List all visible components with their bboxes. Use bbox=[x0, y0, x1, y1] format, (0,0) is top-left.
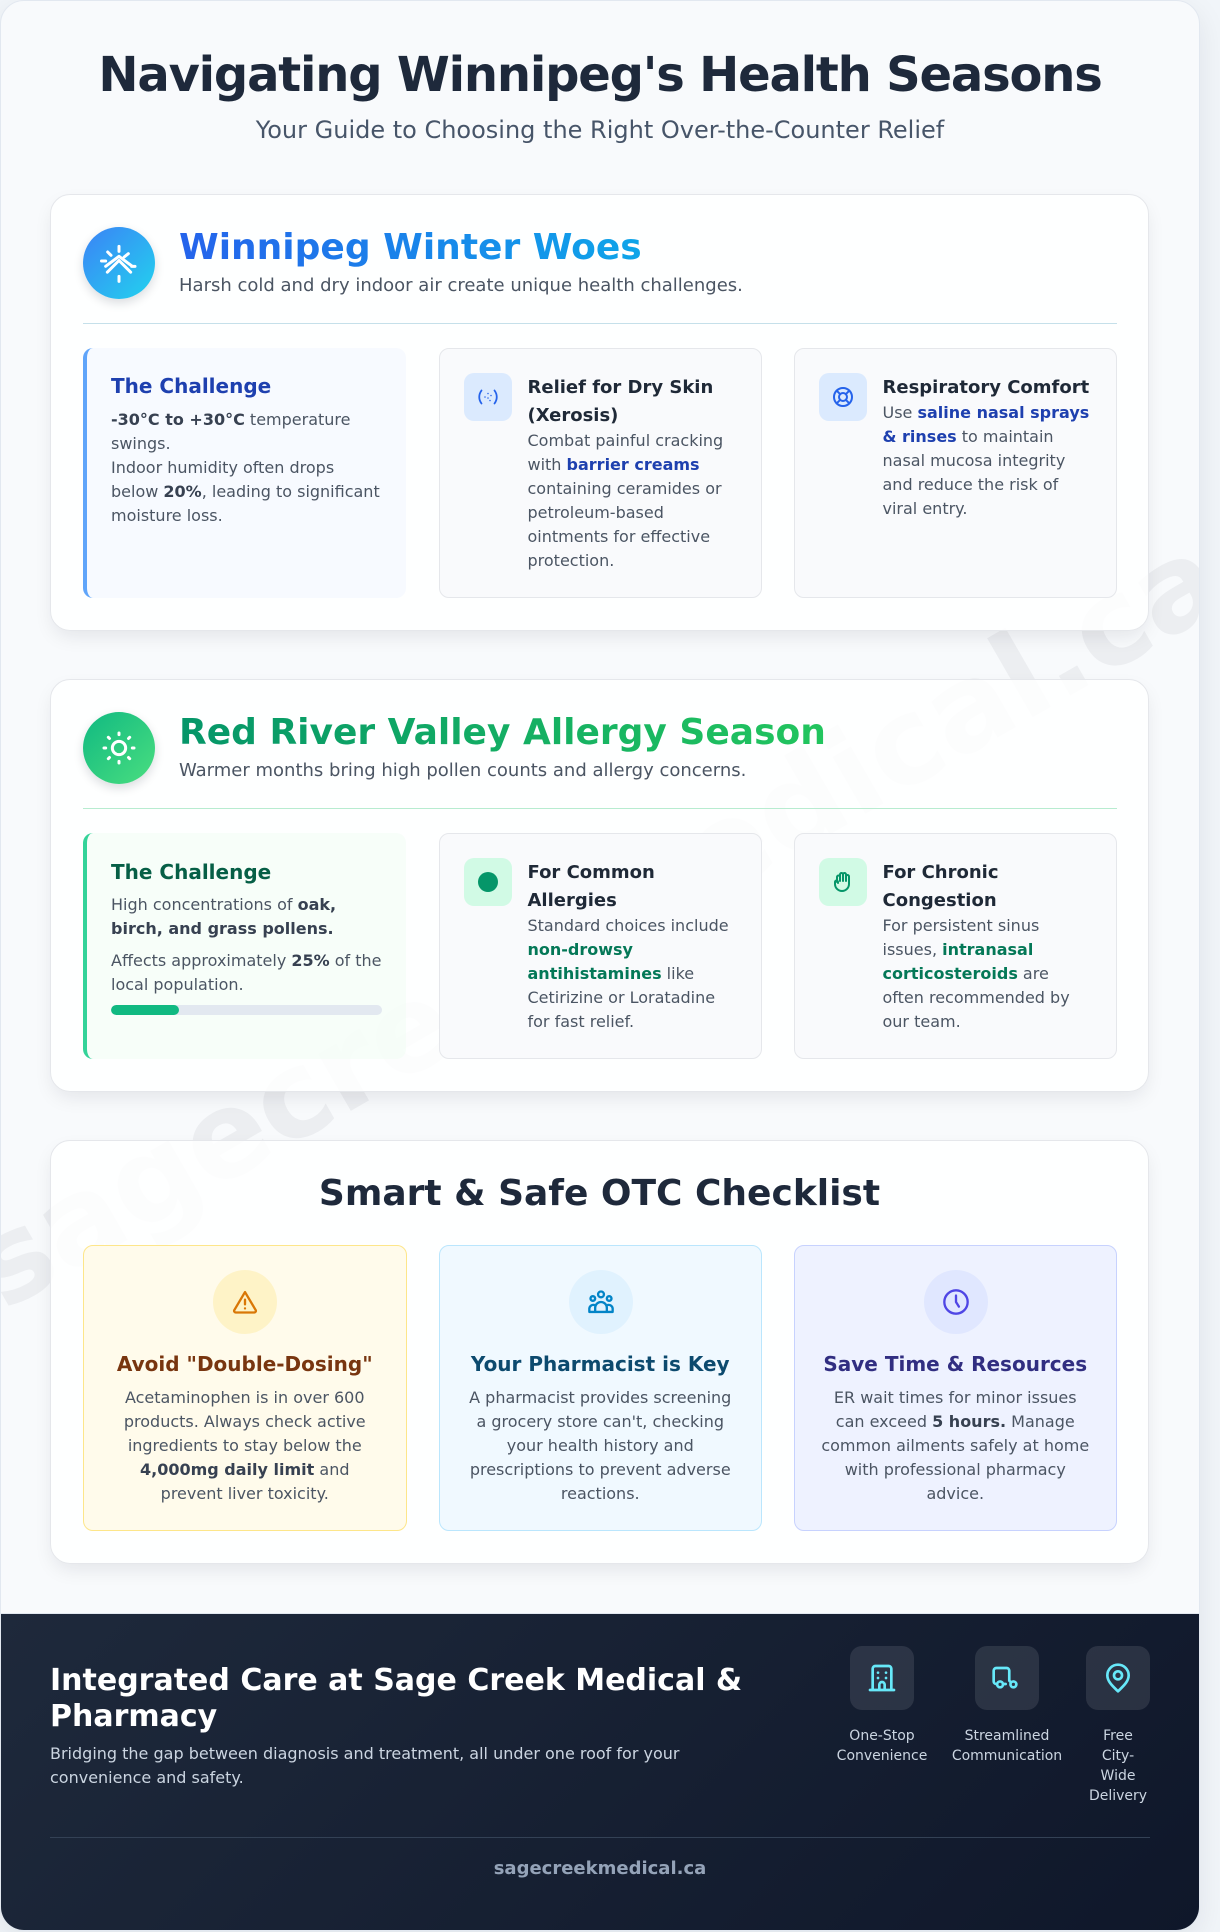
icon: dry skin bbox=[464, 373, 512, 421]
tile text: reactions. bbox=[561, 1484, 640, 1503]
card text: local population. bbox=[111, 975, 244, 994]
tile: pharmacist bbox=[438, 1245, 762, 1531]
card text: often recommended by bbox=[882, 988, 1070, 1007]
card text: corticosteroids are bbox=[882, 964, 1049, 983]
card text bbox=[882, 403, 1089, 518]
icon: snowflake chevrons bbox=[83, 227, 155, 299]
icon: sun bbox=[83, 712, 155, 784]
label: one-stop: One-Stop bbox=[849, 1728, 915, 1744]
label: one-stop: Convenience bbox=[837, 1748, 927, 1764]
card: respiratory bbox=[794, 348, 1117, 598]
card text: for fast relief. bbox=[528, 1012, 634, 1031]
card heading bbox=[882, 862, 998, 911]
footer text: Bridging the gap between diagnosis and treatment, all under one roof for your bbox=[50, 1744, 679, 1763]
card text: our team. bbox=[882, 1012, 961, 1031]
progress bar 25% bbox=[111, 1005, 382, 1015]
footer heading: Integrated Care at Sage Creek Medical & bbox=[50, 1662, 742, 1698]
card text: moisture loss. bbox=[111, 506, 223, 525]
tile: save time bbox=[794, 1245, 1117, 1531]
card heading: (Xerosis) bbox=[528, 405, 618, 426]
label: delivery: Wide bbox=[1101, 1768, 1135, 1784]
card text: Cetirizine or Loratadine bbox=[528, 988, 715, 1007]
card text: High concentrations of oak, bbox=[111, 895, 336, 914]
icon: hand bbox=[818, 858, 866, 906]
icon: clock bbox=[924, 1270, 988, 1334]
card text bbox=[111, 951, 382, 994]
icon: warning bbox=[213, 1270, 277, 1334]
icon: dot bbox=[464, 858, 512, 906]
icon: lifebuoy bbox=[818, 373, 866, 421]
card text: and reduce the risk of bbox=[882, 475, 1058, 494]
card text: Combat painful cracking bbox=[528, 431, 723, 450]
heading: checklist: Smart & Safe OTC Checklist bbox=[319, 1172, 880, 1214]
tile heading: Your Pharmacist is Key bbox=[471, 1352, 730, 1376]
tile text bbox=[469, 1388, 731, 1503]
heading: allergy: Red River Valley Allergy Season bbox=[179, 712, 826, 753]
tile text bbox=[124, 1388, 366, 1503]
card text: protection. bbox=[528, 551, 614, 570]
card heading: Relief for Dry Skin bbox=[528, 377, 713, 398]
card text bbox=[882, 916, 1070, 1031]
icon: people bbox=[568, 1270, 632, 1334]
card: chronic congestion bbox=[794, 833, 1117, 1059]
card text: antihistamines like bbox=[528, 964, 694, 983]
panel: winter woes bbox=[50, 194, 1149, 631]
tile text: prescriptions to prevent adverse bbox=[470, 1460, 731, 1479]
icon: building bbox=[850, 1646, 914, 1710]
card text: below 20%, leading to significant bbox=[111, 482, 380, 501]
tile text: common ailments safely at home bbox=[821, 1436, 1089, 1455]
card: dry skin bbox=[438, 348, 762, 598]
tile text: your health history and bbox=[507, 1436, 694, 1455]
card text bbox=[111, 895, 336, 938]
footer bbox=[1, 1613, 1199, 1931]
card text: Standard choices include bbox=[528, 916, 729, 935]
title: Navigating Winnipeg's Health Seasons bbox=[98, 47, 1102, 103]
label: delivery: Free bbox=[1103, 1728, 1133, 1744]
card text: viral entry. bbox=[882, 499, 967, 518]
tile text bbox=[821, 1388, 1089, 1503]
tile heading: Save Time & Resources bbox=[823, 1352, 1087, 1376]
card: the challenge bbox=[83, 833, 406, 1059]
section description: Harsh cold and dry indoor air create unique health challenges. bbox=[179, 275, 743, 296]
tile text: Acetaminophen is in over 600 bbox=[125, 1388, 365, 1407]
tile text: A pharmacist provides screening bbox=[469, 1388, 731, 1407]
label: delivery: Delivery bbox=[1089, 1788, 1147, 1804]
card heading: Respiratory Comfort bbox=[882, 377, 1089, 398]
tile text: 4,000mg daily limit and bbox=[140, 1460, 349, 1479]
label: streamlined: Streamlined bbox=[965, 1728, 1049, 1744]
card text: containing ceramides or bbox=[528, 479, 722, 498]
label: streamlined: Communication bbox=[952, 1748, 1062, 1764]
icon: delivery bbox=[975, 1646, 1039, 1710]
card text: Indoor humidity often drops bbox=[111, 458, 334, 477]
subtitle: Your Guide to Choosing the Right Over-the-Counter Relief bbox=[256, 116, 944, 144]
card text: -30°C to +30°C temperature bbox=[111, 410, 350, 429]
card heading: For Chronic bbox=[882, 862, 998, 883]
card text: For persistent sinus bbox=[882, 916, 1039, 935]
section description: Warmer months bring high pollen counts and allergy concerns. bbox=[179, 760, 746, 781]
card text: swings. bbox=[111, 434, 171, 453]
website url: sagecreekmedical.ca bbox=[494, 1858, 706, 1879]
card text: birch, and grass pollens. bbox=[111, 919, 334, 938]
tile heading: Avoid "Double-Dosing" bbox=[117, 1352, 373, 1376]
card text: & rinses to maintain bbox=[882, 427, 1054, 446]
tile text: products. Always check active bbox=[124, 1412, 366, 1431]
tile text: with professional pharmacy bbox=[845, 1460, 1066, 1479]
card text: Affects approximately 25% of the bbox=[111, 951, 382, 970]
card: common allergies bbox=[438, 833, 762, 1059]
label: delivery bbox=[1089, 1728, 1147, 1804]
card text: ointments for effective bbox=[528, 527, 710, 546]
card text bbox=[111, 410, 380, 525]
footer text: convenience and safety. bbox=[50, 1768, 244, 1787]
card heading: The Challenge bbox=[111, 860, 271, 884]
card heading: The Challenge bbox=[111, 374, 271, 398]
card text: petroleum-based bbox=[528, 503, 664, 522]
card heading bbox=[528, 862, 655, 911]
label: one-stop bbox=[837, 1728, 927, 1764]
tile text: a grocery store can't, checking bbox=[476, 1412, 724, 1431]
card text: issues, intranasal bbox=[882, 940, 1033, 959]
tile text: ingredients to stay below the bbox=[128, 1436, 362, 1455]
card text bbox=[528, 431, 723, 570]
card text: with barrier creams bbox=[528, 455, 700, 474]
panel: allergy season bbox=[50, 679, 1149, 1092]
card heading: Allergies bbox=[528, 890, 617, 911]
footer heading: Pharmacy bbox=[50, 1698, 217, 1734]
card heading bbox=[528, 377, 713, 426]
footer heading bbox=[50, 1662, 742, 1734]
tile text: ER wait times for minor issues bbox=[834, 1388, 1077, 1407]
tile text: prevent liver toxicity. bbox=[161, 1484, 329, 1503]
panel: OTC checklist bbox=[50, 1140, 1149, 1564]
card: the challenge bbox=[83, 348, 406, 598]
card text bbox=[528, 916, 729, 1031]
card text: nasal mucosa integrity bbox=[882, 451, 1065, 470]
card text: non-drowsy bbox=[528, 940, 633, 959]
footer text bbox=[50, 1744, 680, 1787]
tile text: advice. bbox=[926, 1484, 984, 1503]
tile: double dosing bbox=[83, 1245, 406, 1531]
label: streamlined bbox=[952, 1728, 1062, 1764]
label: delivery: City- bbox=[1102, 1748, 1134, 1764]
card text: Use saline nasal sprays bbox=[882, 403, 1089, 422]
card heading: Congestion bbox=[882, 890, 997, 911]
icon: location pin bbox=[1086, 1646, 1150, 1710]
card heading: For Common bbox=[528, 862, 655, 883]
tile text: can exceed 5 hours. Manage bbox=[836, 1412, 1075, 1431]
heading: winter: Winnipeg Winter Woes bbox=[179, 227, 642, 268]
